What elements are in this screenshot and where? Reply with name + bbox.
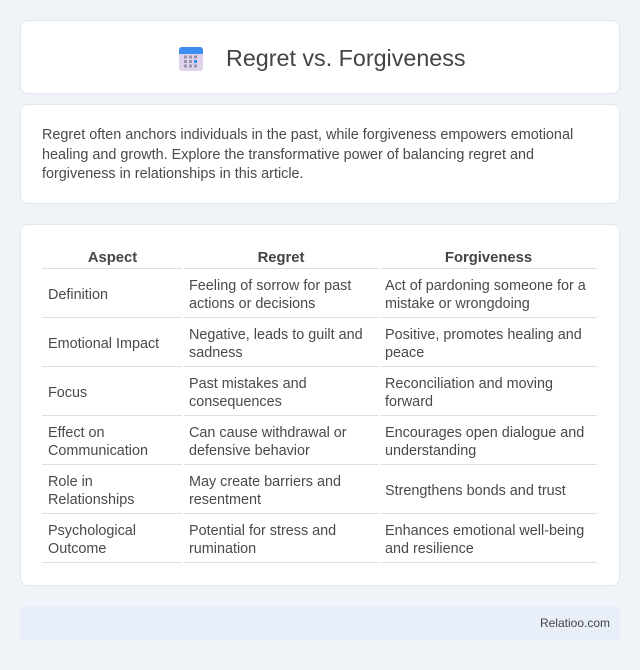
row: Effect on Communication: Can cause withdrawal or (189, 425, 347, 441)
row: Emotional Impact (48, 327, 582, 361)
row: Effect on Communication: Communication (48, 443, 148, 459)
row: Effect on Communication: Effect on (48, 425, 105, 441)
icon: calendar (179, 47, 203, 71)
row: Definition (48, 278, 586, 312)
row: Role in Relationships (48, 474, 566, 508)
row: Emotional Impact: Negative, leads to guilt and (189, 327, 363, 343)
row: Focus: forward (385, 394, 433, 410)
row: Psychological Outcome: Outcome (48, 541, 106, 557)
row: Focus: Reconciliation and moving (385, 376, 553, 392)
row: Focus: Past mistakes and (189, 376, 307, 392)
row: Role in Relationships: Relationships (48, 492, 134, 508)
title panel (20, 20, 620, 94)
intro text (42, 127, 573, 182)
heading: Regret vs. Forgiveness (226, 45, 466, 71)
row: Role in Relationships: resentment (189, 492, 261, 508)
row: Role in Relationships: Strengthens bonds and trust (385, 483, 566, 499)
row: Definition: Feeling of sorrow for past (189, 278, 351, 294)
row: Definition: Act of pardoning someone for a (385, 278, 586, 294)
row: Role in Relationships: May create barriers and (189, 474, 341, 490)
footer bar (20, 606, 620, 640)
footer text: Relatioo.com: Relatioo.com (540, 616, 610, 630)
row: Psychological Outcome (48, 523, 584, 557)
row: Psychological Outcome: and resilience (385, 541, 474, 557)
row: Definition: Definition (48, 287, 108, 303)
row: Psychological Outcome: Potential for stress and (189, 523, 336, 539)
row: Focus: consequences (189, 394, 282, 410)
row: Effect on Communication (48, 425, 584, 459)
row: Definition: mistake or wrongdoing (385, 296, 530, 312)
row: Emotional Impact: Positive, promotes healing and (385, 327, 582, 343)
row: Effect on Communication: understanding (385, 443, 476, 459)
intro text: healing and growth. Explore the transformative power of balancing regret and (42, 146, 534, 162)
row: Psychological Outcome: Enhances emotional well-being (385, 523, 584, 539)
header: Regret: Regret (258, 250, 304, 266)
header: Forgiveness: Forgiveness (445, 250, 532, 266)
row: Psychological Outcome: Psychological (48, 523, 136, 539)
row: Definition: actions or decisions (189, 296, 315, 312)
row: Emotional Impact: peace (385, 345, 424, 361)
row: Focus (48, 376, 553, 410)
row: Emotional Impact: Emotional Impact (48, 336, 159, 352)
intro text: forgiveness in relationships in this article. (42, 166, 304, 182)
row: Psychological Outcome: rumination (189, 541, 256, 557)
header: Aspect: Aspect (88, 250, 137, 266)
row: Role in Relationships: Role in (48, 474, 93, 490)
row: Effect on Communication: Encourages open dialogue and (385, 425, 584, 441)
row: Effect on Communication: defensive behavior (189, 443, 310, 459)
table panel (20, 224, 620, 586)
intro text: Regret often anchors individuals in the past, while forgiveness empowers emotional (42, 127, 573, 143)
row: Focus: Focus (48, 385, 87, 401)
row: Emotional Impact: sadness (189, 345, 243, 361)
intro panel (20, 104, 620, 204)
